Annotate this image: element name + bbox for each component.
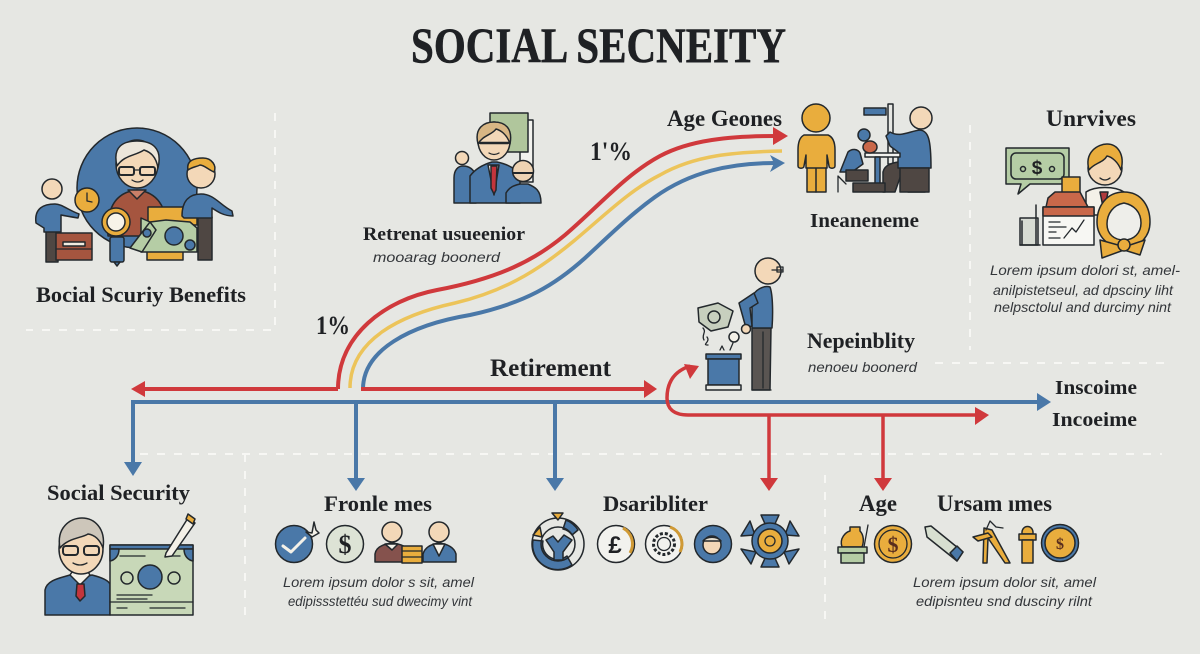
panel: nepeinblity: [698, 258, 918, 390]
body text: Lorem ipsum dolor s sit, amel: [283, 574, 475, 590]
icon: cylinder tool: [925, 526, 963, 561]
icon: check badge: [276, 522, 319, 562]
panel: social security: [45, 480, 195, 615]
arrow: blue timeline with drops: [124, 393, 1051, 491]
panel: ineaneneme: [798, 104, 932, 232]
icon: face badge: [694, 526, 732, 562]
icon: blue gear with orange center: [741, 515, 799, 567]
body text: [990, 262, 1180, 315]
panel: dsaribliter: [532, 491, 799, 570]
heading: social security: Social Security: [47, 480, 191, 505]
heading: dsaribliter: Dsaribliter: [603, 491, 708, 516]
heading: nepeinblity: Nepeinblity: [807, 328, 915, 353]
heading: unrvives: Unrvives: [1046, 106, 1136, 131]
percentage label upper: 1'%: [590, 137, 632, 166]
body text: anilpistetseul, ad dpsciny liht: [993, 282, 1174, 298]
panel: age and ursam imes: [838, 491, 1097, 609]
icon: person and workstation: [798, 104, 932, 192]
body text: [283, 574, 475, 609]
icon: pound coin: £: [608, 532, 622, 559]
subtext: nenoeu boonerd: nenoeu boonerd: [808, 359, 918, 375]
body text: [913, 574, 1097, 609]
icon: two people with coins: [375, 522, 456, 563]
icon: compass tool: [973, 521, 1010, 563]
icon: retirees with money: [36, 128, 233, 266]
body text: edipissstettéu sud dwecimy vint: [288, 593, 473, 609]
icon: dollar coin: $: [888, 532, 898, 557]
icon: business people: [454, 113, 541, 203]
heading: retrenat usueenior: Retrenat usueenior: [363, 225, 525, 245]
heading: age geones: Age Geones: [667, 106, 782, 131]
icon: man with cheque and pencil: [45, 514, 195, 615]
icon: basket: [838, 525, 868, 563]
heading: ursam imes: Ursam ımes: [937, 491, 1052, 516]
label: retirement: Retirement: [490, 355, 612, 382]
icon: orange column: [1019, 526, 1036, 563]
icon: gear coin: [646, 526, 682, 562]
body text: nelpsctolul and durcimy nint: [994, 299, 1172, 315]
icon: dollar sign on note: $: [1032, 158, 1043, 179]
body text: Lorem ipsum dolor sit, amel: [913, 574, 1097, 590]
panel: fronle mes: [276, 491, 475, 609]
percentage label lower: 1%: [316, 311, 350, 340]
body text: Lorem ipsum dolori st, amel-: [990, 262, 1180, 278]
arrow: red left and right line: [131, 380, 657, 398]
label: incoeime: Incoeime: [1052, 409, 1137, 431]
icon: blue ringed coin: $: [1056, 536, 1064, 553]
panel: social security benefits: [36, 128, 246, 307]
icon: dollar coin: [326, 526, 364, 562]
panel: unrvives: [990, 106, 1180, 315]
panel: retirement user: [363, 113, 541, 265]
icon: dollar coin: [874, 526, 912, 562]
icon: money, report and ring: [1006, 144, 1150, 258]
icon: dollar coin: $: [338, 530, 352, 559]
label: inscoime: Inscoime: [1055, 377, 1137, 399]
heading: bocial scuriy benefits: Bocial Scuriy Benefits: [36, 282, 246, 307]
icon: pound coin: [598, 526, 634, 562]
icon: progress ring: [532, 513, 584, 570]
icon: man dropping money in bin: [698, 258, 783, 390]
heading: ineaneneme: Ineaneneme: [810, 210, 919, 232]
arrow: red branch with drops: [667, 364, 989, 491]
icon: blue ringed coin: [1042, 524, 1078, 562]
arrow: rising red, yellow and blue curves: [338, 127, 788, 389]
heading: fronle mes: Fronle mes: [324, 491, 432, 516]
heading: age: Age: [859, 491, 897, 516]
subtext: mooarag boonerd: mooarag boonerd: [373, 249, 501, 265]
title: SOCIAL SECNEITY: [411, 17, 786, 73]
body text: edipisnteu snd dusciny rilnt: [916, 593, 1093, 609]
